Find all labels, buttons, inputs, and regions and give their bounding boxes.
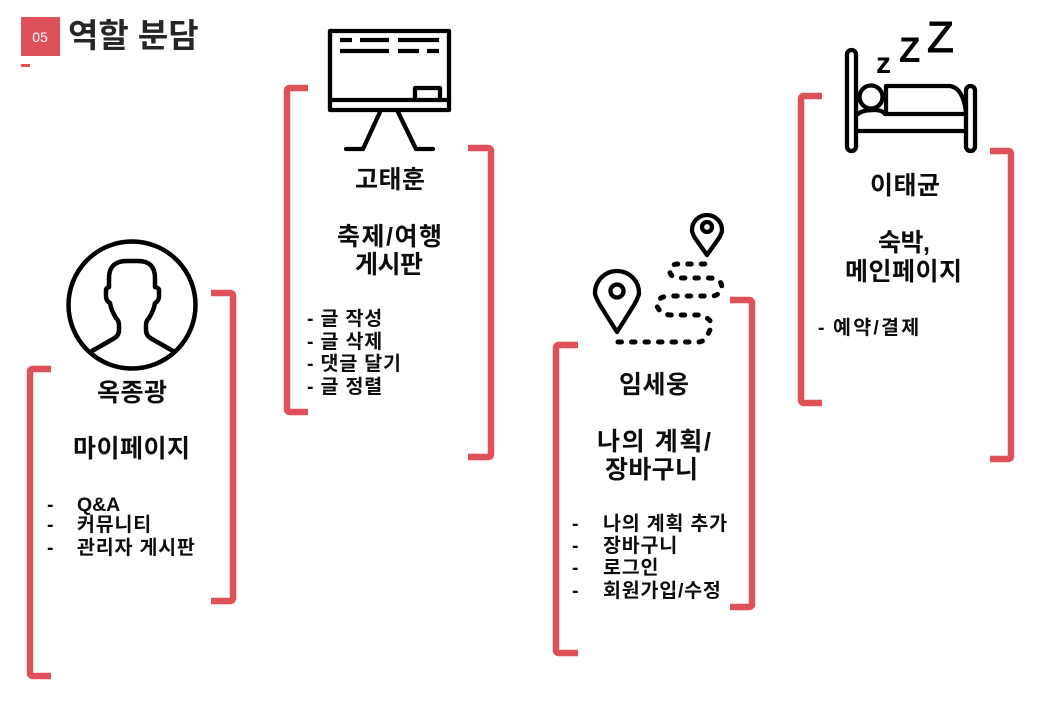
- task list: -: [572, 513, 579, 535]
- panel: 이태균: [801, 13, 1011, 459]
- role: 메인페이지: [845, 258, 962, 286]
- panel: 고태훈: [287, 31, 491, 457]
- role: [845, 229, 962, 286]
- role: 게시판: [355, 251, 423, 279]
- icon: sleeping in bed: [847, 50, 975, 151]
- icon: presentation board: [330, 31, 449, 149]
- task list: -: [572, 580, 579, 602]
- left bracket: [287, 88, 308, 412]
- icon: map route: [595, 215, 722, 342]
- task list: [307, 308, 402, 398]
- task list: -: [47, 514, 54, 536]
- role: 나의 계획/: [597, 428, 711, 456]
- name: 이태균: [870, 172, 940, 200]
- icon: z letters: Z: [927, 13, 954, 62]
- role: [597, 428, 711, 484]
- task list: -: [818, 317, 825, 339]
- right bracket: [730, 300, 752, 607]
- task list: -: [572, 557, 579, 579]
- right bracket: [990, 151, 1011, 459]
- icon: person: [68, 242, 196, 368]
- task list: [572, 513, 728, 602]
- task list: 예약/결제: [833, 317, 920, 339]
- icon: z letters: z: [876, 47, 891, 80]
- panel: 옥종광: [30, 242, 233, 676]
- section number badge: [21, 17, 60, 56]
- section number badge: 05: [32, 29, 48, 45]
- panel: 임세웅: [556, 215, 752, 653]
- left bracket: [556, 345, 578, 653]
- name: 고태훈: [355, 166, 425, 194]
- task list: -: [572, 535, 579, 557]
- role: 축제/여행: [337, 223, 442, 251]
- task list: 커뮤니티: [77, 514, 152, 536]
- name: 임세웅: [619, 371, 689, 399]
- task list: - 글 정렬: [307, 376, 383, 398]
- name: 옥종광: [97, 379, 167, 407]
- task list: 회원가입/수정: [603, 580, 722, 602]
- task list: 장바구니: [603, 535, 678, 557]
- right bracket: [468, 148, 491, 457]
- title accent: [21, 64, 30, 67]
- task list: 로그인: [603, 557, 659, 579]
- task list: 나의 계획 추가: [603, 513, 728, 535]
- title: 역할 분담: [68, 17, 199, 54]
- right bracket: [211, 293, 233, 601]
- task list: 관리자 게시판: [77, 537, 196, 559]
- role: 장바구니: [605, 456, 698, 484]
- left bracket: [30, 369, 51, 676]
- task list: - 댓글 달기: [307, 353, 402, 375]
- task list: [47, 494, 196, 559]
- role: 마이페이지: [73, 435, 190, 463]
- task list: - 글 작성: [307, 308, 383, 330]
- left bracket: [801, 96, 822, 403]
- icon: z letters: Z: [899, 31, 920, 70]
- task list: - 글 삭제: [307, 331, 383, 353]
- role: [337, 223, 442, 279]
- role: 숙박,: [878, 229, 930, 257]
- icon: z letters: [876, 13, 954, 80]
- task list: Q&A: [77, 494, 121, 516]
- task list: -: [47, 537, 54, 559]
- task list: -: [47, 494, 54, 516]
